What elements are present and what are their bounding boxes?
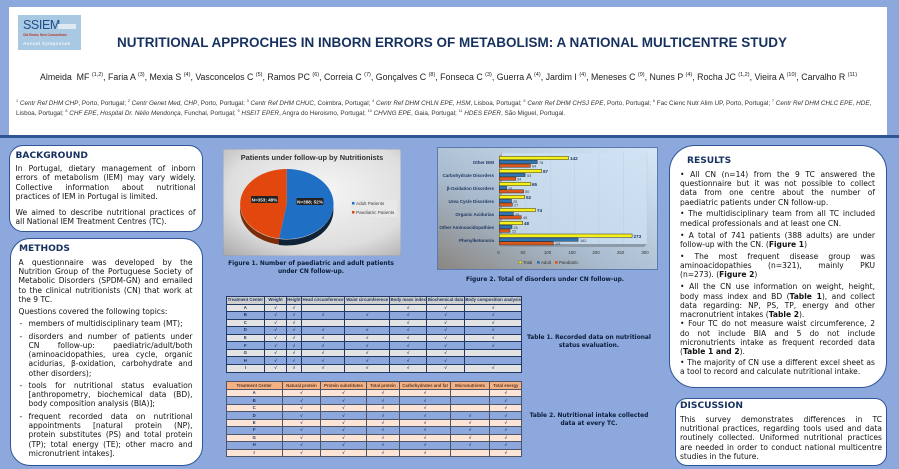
list item: recorded data: appointments [natural protein (NP),: [28, 421, 192, 430]
table 2: nutritional intake: Micronutrients: [455, 382, 485, 388]
table 2: nutritional intake: √: [300, 420, 303, 425]
table 2: nutritional intake: Total protein: [370, 382, 396, 388]
discussion text: studies in the future.: [680, 452, 759, 461]
table 1: nutritional status evaluation: √: [407, 327, 409, 332]
table 2: nutritional intake: √: [505, 390, 507, 395]
list item: disorders: other disorders);: [28, 369, 91, 378]
table 1: nutritional status evaluation: H: [244, 358, 247, 363]
table 1: nutritional status evaluation: Treatment Center: [228, 297, 263, 302]
table 1: nutritional status evaluation: √: [322, 365, 324, 370]
figure 2: bar chart: Urea Cycle Disorders: [448, 199, 494, 204]
methods intro text: the 9 TC.: [18, 295, 52, 304]
table 1: nutritional status evaluation: √: [444, 305, 447, 310]
panel: results: [669, 145, 887, 388]
caption: figure 1: Figure 1. Number of paediatric and adult patients: [228, 261, 394, 267]
table 2: nutritional intake: I: [254, 450, 255, 455]
discussion text: nutritional practices, regarding tools used and data: [680, 424, 882, 433]
table 1: nutritional status evaluation: √: [407, 350, 409, 355]
caption: figure 2: Figure 2. Total of disorders under CN follow-up.: [466, 277, 624, 283]
list item: recorded data: [20, 412, 192, 458]
figure 2: bar chart: 74: [537, 208, 543, 213]
panel: methods: [10, 238, 203, 466]
table 2: nutritional intake: √: [382, 442, 384, 447]
table 2: nutritional intake: D: [253, 413, 256, 418]
methods intro text: [18, 258, 193, 304]
table 1: nutritional status evaluation: √: [366, 327, 368, 332]
figure 2: bar chart: 50: [521, 250, 526, 255]
result: questionnaire: [680, 170, 876, 207]
table 1: nutritional status evaluation: √: [274, 335, 277, 340]
result: questionnaire: questionnaire but it was not possible to collect: [680, 179, 875, 188]
table 1: nutritional status evaluation: √: [274, 320, 277, 325]
table 2: nutritional intake: √: [382, 405, 384, 410]
table 2: nutritional intake: Carbohydrates and fat: [402, 382, 448, 388]
table 2: nutritional intake: √: [469, 427, 471, 432]
table 1: nutritional status evaluation: √: [322, 312, 324, 317]
table 2: nutritional intake: √: [505, 450, 507, 455]
figure 2: bar chart: 52: [526, 195, 532, 200]
table 2: nutritional intake: √: [300, 413, 303, 418]
result: questionnaire: • All CN (n=14) from the 9 TC answered the: [680, 170, 875, 179]
table 1: nutritional status evaluation: √: [492, 312, 494, 317]
table 2: nutritional intake: √: [424, 420, 426, 425]
heading: background: BACKGROUND: [16, 151, 88, 161]
table 2: nutritional intake: √: [505, 420, 507, 425]
figure 2: bar chart: 300: [641, 250, 649, 255]
table 2: nutritional intake: √: [382, 450, 384, 455]
figure 2: bar chart: 273: [634, 234, 642, 239]
methods intro text: Nutrition Group of the Portuguese Society of: [18, 267, 192, 276]
table 2: nutritional intake: √: [342, 413, 345, 418]
table 1: nutritional status evaluation: √: [274, 342, 277, 348]
header panel: [9, 7, 887, 135]
discussion text: routinely collected. Uniformed nutritional practices: [680, 433, 882, 442]
affiliations: [16, 99, 871, 117]
table 2: nutritional intake: √: [505, 442, 507, 447]
panel: discussion: [675, 398, 887, 466]
figure 2: bar chart: Total: [523, 260, 532, 265]
table 2: nutritional intake: √: [382, 427, 384, 432]
result: team: medical professionals and at least one CN.: [680, 219, 841, 228]
result: excel sheet: [680, 358, 875, 376]
list item: disorders: (aminoacidopathies, urea cycle, organic: [28, 350, 192, 359]
table 1: nutritional status evaluation: √: [293, 305, 295, 310]
table 2: nutritional intake: √: [342, 390, 345, 395]
table 1: nutritional status evaluation: √: [492, 335, 494, 340]
table 1: nutritional status evaluation: √: [492, 365, 494, 370]
table 1: nutritional status evaluation: Biochemical data: [428, 297, 463, 302]
table 2: nutritional intake: √: [424, 435, 426, 440]
logo: SSIEM annual symposium: SSIEM: [23, 18, 60, 32]
table 1: nutritional status evaluation: √: [293, 320, 295, 325]
figure 2: bar chart: 26: [514, 226, 518, 230]
table 1: nutritional status evaluation: √: [293, 358, 295, 363]
panel: background: [9, 145, 203, 232]
affiliations: 1 Centr Ref DHM CHP, Porto, Portugal; 2 Centr Genet Med, CHP, Porto, Portugal; 3 Centr Ref DHM CHUC, Coimbra, Portugal; 4 Centr Ref DHM CHLN EPE, HSM, Lisboa, Portugal; 5 Centr Ref DHM CHSJ EPE, Porto, Portugal; 6 Fac Cienc Nutr Alim UP, Porto, Portugal; 7 Centr Ref DHM CHLC EPE, HDE,: [16, 99, 871, 107]
table 1: nutritional status evaluation: √: [492, 305, 494, 310]
table 1: nutritional status evaluation: √: [274, 365, 277, 370]
methods intro text: Metabolic Disorders (SPDM-GN) and emailed: [18, 276, 192, 285]
table 1: nutritional status evaluation: B: [244, 312, 247, 317]
table 2: nutritional intake: √: [342, 398, 345, 403]
caption: table 2: Table 2. Nutritional intake collected: [530, 413, 648, 419]
table 1: nutritional status evaluation: √: [322, 342, 324, 348]
table 1: nutritional status evaluation: √: [366, 335, 368, 340]
caption: table 1: Table 1. Recorded data on nutritional: [527, 335, 651, 341]
table 2: nutritional intake: √: [424, 413, 426, 418]
table 1: nutritional status evaluation: D: [244, 327, 247, 332]
table 1: nutritional status evaluation: E: [244, 335, 247, 340]
table 2: nutritional intake: H: [253, 442, 256, 447]
table 2: nutritional intake: √: [382, 398, 384, 403]
list item: recorded data: frequent recorded data on nutritional: [28, 412, 192, 421]
discussion text: [680, 415, 882, 461]
figure 1: pie chart: Adult Patients: [356, 201, 385, 206]
table 1: nutritional status evaluation: Height: [287, 297, 301, 302]
table 1: nutritional status evaluation: √: [407, 365, 409, 370]
background text: [16, 164, 196, 201]
table 1: nutritional status evaluation: √: [274, 327, 277, 332]
table 1: nutritional status evaluation: I: [245, 365, 246, 370]
figure 2: bar chart: 162: [580, 239, 586, 243]
list item: recorded data: (TP); total energy (TE); other macro and: [28, 440, 192, 449]
result: excel sheet: a tool to record and calculate nutritional intake.: [680, 367, 860, 376]
discussion text: are needed in order to conduct national multicentre: [680, 443, 882, 452]
list item: recorded data: protein substitutes (PS) and total protein: [28, 430, 192, 439]
background aim text: We aimed to describe nutritional practices of: [16, 208, 196, 217]
heading: methods: METHODS: [19, 244, 70, 254]
figure 2: bar chart: 15: [508, 187, 512, 191]
table 2: nutritional intake: Treatment Center: [236, 382, 272, 388]
table 1: nutritional status evaluation: Body mass index: [390, 297, 426, 302]
table 2: nutritional intake: √: [382, 435, 384, 440]
table 2: nutritional intake: B: [253, 398, 256, 403]
result: totals: • A total of 741 patients (388 adults) are under: [680, 231, 875, 240]
table 2: nutritional intake: √: [424, 405, 426, 410]
background text: practices of IEM in Portugal is limited.: [16, 192, 158, 201]
logo: SSIEM annual symposium: Old Roots, New Connections: [23, 32, 67, 36]
figure 2: bar chart: 53: [527, 174, 531, 178]
figure 1: pie chart: N=353; 48%: [252, 198, 277, 202]
result: team: • The multidisciplinary team from all TC included: [680, 209, 875, 218]
table 1: nutritional status evaluation: Head circumference: [302, 297, 344, 302]
table 1: nutritional status evaluation: √: [274, 358, 277, 363]
result: data collected: data regarding: NP, PS, TP, energy and other: [680, 301, 875, 310]
table 2: nutritional intake: √: [469, 413, 471, 418]
list item: disorders: disorders and number of patients under: [28, 332, 192, 341]
caption: table 1: [527, 334, 651, 349]
table 1: nutritional status evaluation: √: [492, 320, 494, 325]
table 2: nutritional intake: √: [469, 442, 471, 447]
figure 2: bar chart: Phenylketonuria: [459, 238, 494, 243]
table 2: nutritional intake: √: [300, 450, 303, 455]
table 2: nutritional intake: √: [382, 420, 384, 425]
result: questionnaire: paediatric patients under CN follow-up.: [680, 198, 828, 207]
table 1: nutritional status evaluation: √: [322, 350, 324, 355]
panel: methods: -: [20, 412, 22, 421]
list item: recorded data: micronutrient intakes].: [28, 449, 115, 458]
table 1: nutritional status evaluation: √: [407, 342, 409, 348]
result: excel sheet: • The majority of CN use a different excel sheet as: [680, 358, 875, 367]
figure 2: bar chart: 65: [532, 182, 538, 187]
table 2: nutritional intake: √: [342, 435, 345, 440]
table 1: nutritional status evaluation: √: [366, 350, 368, 355]
table 2: nutritional intake: √: [424, 442, 426, 447]
table 1: nutritional status evaluation: A: [244, 305, 247, 310]
list item: disorders: CN follow-up: paediatric/adult/both: [28, 341, 192, 350]
background aim text: [16, 208, 196, 226]
table 2: nutritional intake: √: [424, 390, 426, 395]
list item: tools: [20, 381, 192, 408]
table 1: nutritional status evaluation: Waist circumference: [346, 297, 388, 302]
table 2: nutritional intake: √: [382, 390, 384, 395]
table 1: nutritional status evaluation: Weight: [268, 297, 283, 302]
list item: team: members of multidisciplinary team (MT);: [28, 319, 183, 328]
figure 2: bar chart: 50: [525, 190, 529, 194]
table 1: nutritional status evaluation: √: [293, 335, 295, 340]
table 2: nutritional intake: √: [505, 435, 507, 440]
panel: methods: -: [20, 381, 22, 390]
list item: disorders: [20, 332, 192, 378]
figure 2: bar chart: [437, 147, 658, 270]
figure 2: bar chart: Adult: [541, 260, 552, 265]
table 1: nutritional status evaluation: √: [444, 358, 447, 363]
table 2: nutritional intake: √: [505, 405, 507, 410]
table 1: nutritional status evaluation: √: [407, 312, 409, 317]
table 1: nutritional status evaluation: √: [293, 312, 295, 317]
figure 2: bar chart: Carbohydrate Disorders: [442, 173, 494, 178]
figure 2: bar chart: 22: [512, 230, 516, 234]
result: disease group: (n=273). (Figure 2): [680, 270, 757, 279]
list item: tools: [anthropometry, biochemical data (BD),: [28, 390, 192, 399]
result: disease group: • The most frequent disease group was: [680, 252, 875, 261]
table 1: nutritional status evaluation: √: [322, 335, 324, 340]
table 2: nutritional intake: √: [505, 413, 507, 418]
result: totals: [680, 231, 875, 249]
figure 2: bar chart: 64: [532, 164, 536, 168]
figure 2: bar chart: β-Oxidation Disorders: [447, 186, 494, 191]
table 1: nutritional status evaluation: √: [293, 342, 295, 348]
figure 2: bar chart: 0: [497, 250, 500, 255]
table 1: nutritional status evaluation: G: [244, 350, 247, 355]
table 2: nutritional intake: F: [253, 427, 255, 432]
table 1: nutritional status evaluation: √: [274, 350, 277, 355]
list item: tools: tools for nutritional status evaluation: [28, 381, 192, 390]
figure 2: bar chart: Other IEM: [473, 160, 494, 165]
heading: discussion: DISCUSSION: [680, 401, 743, 411]
caption: table 2: data at every TC.: [560, 421, 618, 427]
figure 2: bar chart: 87: [543, 169, 549, 174]
discussion text: This survey demonstrates differences in TC: [680, 415, 882, 424]
table 2: nutritional intake: C: [253, 405, 256, 410]
figure 2: bar chart: Organic Acidurias: [455, 212, 494, 217]
figure 2: bar chart: 111: [555, 242, 561, 246]
table 1: nutritional status evaluation: √: [407, 335, 409, 340]
background text: In Portugal, dietary management of inborn: [16, 164, 196, 173]
table 1: nutritional status evaluation: √: [322, 358, 324, 363]
figure 2: bar chart: 200: [592, 250, 600, 255]
logo: SSIEM annual symposium: Annual Symposium: [23, 41, 71, 46]
figure 2: bar chart: 29: [515, 213, 519, 217]
list item: tools: body composition analysis (BIA)];: [28, 399, 155, 408]
result: data collected: [680, 282, 875, 319]
methods topics lead-in: Questions covered the following topics:: [18, 307, 167, 316]
table 1: nutritional status evaluation: √: [407, 358, 409, 363]
table 2: nutritional intake: √: [342, 442, 345, 447]
table 1: nutritional status evaluation: √: [274, 305, 277, 310]
table 1: nutritional status evaluation: F: [244, 342, 247, 348]
logo: SSIEM annual symposium: [18, 15, 81, 50]
result: omissions: do not include BIA and 5 do not include: [680, 329, 875, 338]
caption: figure 1: [228, 260, 394, 275]
panel: methods: -: [20, 319, 22, 328]
result: disease group: [680, 252, 875, 279]
table 2: nutritional intake: Protein substitutes: [324, 382, 363, 388]
table 1: nutritional status evaluation: √: [492, 342, 494, 348]
table 2: nutritional intake: √: [382, 413, 384, 418]
table 1: nutritional status evaluation: √: [444, 342, 447, 348]
caption: table 2: [530, 412, 648, 427]
table 1: nutritional status evaluation: C: [244, 320, 247, 325]
list item: disorders: acidurias, β-oxidation, carbohydrate and: [28, 359, 192, 368]
table 2: nutritional intake: √: [300, 398, 303, 403]
methods intro text: to the clinical nutritionists (CN) that work at: [18, 286, 192, 295]
table 1: nutritional status evaluation: √: [366, 312, 368, 317]
background text: Collective information about nutritional: [16, 183, 196, 192]
affiliations: Lisboa, Portugal; 8 CHF EPE, Hospital Dr. Nélio Mendonça, Funchal, Portugal; 9 HSEIT EPER, Angra do Heroismo, Portugal; 10 CHVNG EPE, Gaia, Portugal; 11 HDES EPER, São Miguel, Portugal.: [16, 109, 565, 117]
authors: Almeida MF (1,2), Faria A (3), Mexia S (4), Vasconcelos C (5), Ramos PC (6), Correia C (7), Gonçalves C (8), Fonseca C (3), Guerra A (4), Jardim I (4), Meneses C (9), Nunes P (4), Rocha JC (1,2), Vieira A (10), Carvalho R (11): [40, 72, 857, 82]
result: omissions: (Table 1 and 2).: [680, 347, 745, 356]
result: totals: follow-up with the CN. (Figure 1): [680, 240, 807, 249]
figure 2: bar chart: 45: [523, 216, 527, 220]
figure 2: bar chart: 78: [539, 161, 543, 165]
table 2: nutritional intake: Total energy: [493, 382, 518, 388]
table 1: nutritional status evaluation: √: [444, 320, 447, 325]
table 2: nutritional intake: √: [342, 427, 345, 432]
table 1: nutritional status evaluation: √: [366, 365, 368, 370]
title: NUTRITIONAL APPROCHES IN INBORN ERRORS OF METABOLISM: A NATIONAL MULTICENTRE STUDY: [117, 34, 787, 50]
table 2: nutritional intake: Natural protein: [286, 382, 317, 388]
result: data collected: body mass index and BD (Table 1), and collect: [680, 292, 875, 301]
table 2: nutritional intake: √: [342, 450, 345, 455]
figure 1: pie chart: Paediatric Patients: [356, 210, 395, 215]
table 2: nutritional intake: √: [342, 420, 345, 425]
caption: figure 1: under CN follow-up.: [278, 269, 344, 275]
table 2: nutritional intake: √: [300, 390, 303, 395]
table 1: nutritional status evaluation: √: [407, 320, 409, 325]
figure 2: bar chart: 250: [617, 250, 625, 255]
table 2: nutritional intake: √: [342, 405, 345, 410]
table 1: nutritional status evaluation: √: [366, 342, 368, 348]
figure 1: pie chart: [223, 149, 401, 256]
panel: methods: -: [20, 332, 22, 341]
table 1: nutritional status evaluation: √: [492, 327, 494, 332]
table 2: nutritional intake: √: [469, 435, 471, 440]
table 1: nutritional status evaluation: √: [444, 350, 447, 355]
table 1: nutritional status evaluation: √: [293, 327, 295, 332]
table 1: nutritional status evaluation: √: [322, 327, 324, 332]
table 2: nutritional intake: [226, 381, 522, 457]
table 2: nutritional intake: A: [253, 390, 256, 395]
background text: errors of metabolism (IEM) may vary widely.: [16, 173, 196, 182]
table 1: nutritional status evaluation: √: [444, 312, 447, 317]
table 1: nutritional status evaluation: √: [444, 335, 447, 340]
table 2: nutritional intake: √: [424, 427, 426, 432]
table 1: nutritional status evaluation: √: [293, 365, 295, 370]
result: omissions: [680, 319, 875, 356]
table 2: nutritional intake: √: [505, 398, 507, 403]
table 1: nutritional status evaluation: √: [293, 350, 295, 355]
table 2: nutritional intake: √: [505, 427, 507, 432]
figure 1: pie chart: Patients under follow-up by Nutritionists: [241, 153, 383, 162]
figure 2: bar chart: 48: [524, 221, 530, 226]
table 2: nutritional intake: √: [469, 420, 471, 425]
table 2: nutritional intake: √: [424, 398, 426, 403]
methods intro text: A questionnaire was developed by the: [18, 258, 192, 267]
table 2: nutritional intake: √: [300, 435, 303, 440]
figure 2: bar chart: 150: [568, 250, 576, 255]
table 1: nutritional status evaluation: √: [366, 358, 368, 363]
result: team: [680, 209, 875, 228]
table 1: nutritional status evaluation: √: [444, 327, 447, 332]
background aim text: all National IEM Treatment Centres (TC).: [16, 217, 167, 226]
figure 2: bar chart: 25: [513, 200, 517, 204]
heading: results: RESULTS: [687, 156, 731, 166]
figure 2: bar chart: 100: [544, 250, 552, 255]
figure 2: bar chart: Paediatric: [559, 260, 579, 265]
result: disease group: aminoacidopathies (n=321), mainly PKU: [680, 261, 875, 270]
table 2: nutritional intake: √: [300, 442, 303, 447]
result: questionnaire: data from one centre about the number of: [680, 188, 875, 197]
table 1: nutritional status evaluation: √: [407, 305, 409, 310]
result: omissions: micronutrients intake as frequent recorded data: [680, 338, 875, 347]
table 1: nutritional status evaluation: Body composition analysis: [465, 297, 521, 302]
result: omissions: • Four TC do not measure waist circumference, 2: [680, 319, 875, 328]
figure 2: bar chart: 27: [514, 204, 518, 208]
table 1: nutritional status evaluation: [226, 296, 522, 372]
table 1: nutritional status evaluation: √: [274, 312, 277, 317]
table 2: nutritional intake: √: [424, 450, 426, 455]
table 2: nutritional intake: E: [253, 420, 256, 425]
figure 1: pie chart: N=388; 52%: [297, 200, 323, 204]
figure 2: bar chart: 142: [570, 156, 578, 161]
figure 2: bar chart: 34: [517, 178, 521, 182]
result: data collected: macronutrient intakes (Table 2).: [680, 310, 804, 319]
result: data collected: • All the CN use information on weight, height,: [680, 282, 875, 291]
table 2: nutritional intake: √: [300, 405, 303, 410]
table 2: nutritional intake: G: [252, 435, 256, 440]
table 2: nutritional intake: √: [300, 427, 303, 432]
figure 2: bar chart: Other Aminoacidopathies: [439, 225, 494, 230]
table 1: nutritional status evaluation: √: [444, 365, 447, 370]
caption: table 1: status evaluation.: [559, 343, 619, 349]
